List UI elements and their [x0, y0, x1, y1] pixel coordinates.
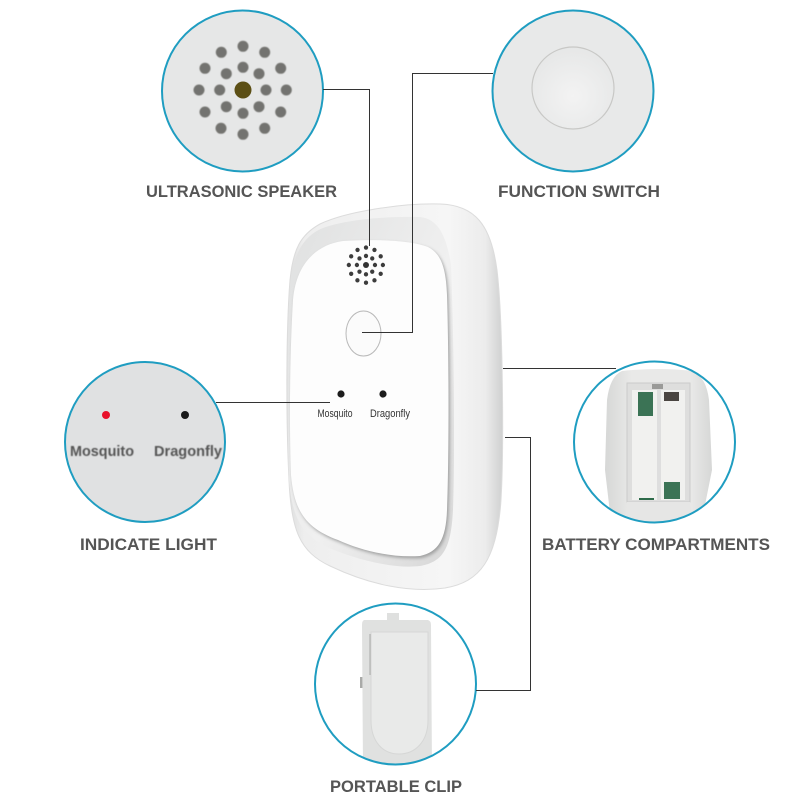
- battery circle ring: [574, 362, 735, 522]
- device mosquito text: Mosquito: [318, 408, 352, 420]
- device white face: [290, 240, 448, 556]
- battery compartment frame: [627, 383, 690, 502]
- speaker centre magnet: [234, 82, 252, 98]
- clip plate: [371, 632, 428, 754]
- device speaker holes: [347, 245, 385, 285]
- device dragonfly light: [379, 390, 387, 398]
- clip circle ring: [315, 604, 476, 764]
- top right contact: [664, 392, 679, 401]
- indicate light label: INDICATE LIGHT: [80, 536, 217, 554]
- leader line: speaker: [323, 90, 370, 246]
- panel: function switch: [492, 10, 660, 201]
- mosquito text: Mosquito: [70, 444, 134, 460]
- clip tab: [387, 613, 399, 620]
- panel: portable clip: [315, 604, 476, 796]
- compartment divider: [657, 390, 661, 500]
- switch circle: [492, 10, 654, 172]
- dragonfly text: Dragonfly: [154, 444, 222, 460]
- panel: ultrasonic speaker: [146, 10, 337, 201]
- device outer body: [287, 204, 503, 589]
- switch label: FUNCTION SWITCH: [498, 183, 660, 201]
- bottom right spring: [664, 482, 680, 499]
- clip edge shadow: [370, 634, 371, 675]
- device mosquito light: [337, 390, 345, 398]
- clip body: [362, 620, 432, 770]
- clip label: PORTABLE CLIP: [330, 778, 462, 796]
- red light: [102, 411, 110, 419]
- panel: indicate light: [65, 362, 225, 554]
- top left spring: [638, 392, 653, 416]
- leader line: clip: [476, 438, 530, 690]
- leader line: battery: [503, 368, 616, 370]
- bottom left contact: [639, 498, 654, 500]
- speaker circle: [162, 10, 323, 172]
- top latch: [652, 384, 663, 389]
- battery compartment inner: [632, 390, 685, 500]
- clip device back: [360, 613, 432, 770]
- panel: battery compartments: [542, 362, 770, 554]
- device function button: [346, 311, 381, 356]
- speaker holes: [194, 41, 292, 140]
- leader line: function switch: [362, 74, 493, 332]
- switch button: [532, 47, 614, 129]
- device dragonfly text: Dragonfly: [370, 408, 410, 420]
- device: central repeller: [287, 204, 503, 589]
- battery circle background: [574, 362, 735, 522]
- leader line: indicate light: [216, 402, 330, 404]
- black light: [181, 411, 189, 419]
- battery device back: [605, 369, 712, 530]
- device raised ring: [288, 217, 454, 567]
- clip side nub: [360, 677, 362, 688]
- speaker label: ULTRASONIC SPEAKER: [146, 183, 337, 201]
- device speaker centre hole: [363, 262, 369, 268]
- light circle: [65, 362, 225, 522]
- lower body strip: [627, 502, 690, 503]
- battery label: BATTERY COMPARTMENTS: [542, 536, 770, 554]
- device face shadow edge: [291, 242, 450, 558]
